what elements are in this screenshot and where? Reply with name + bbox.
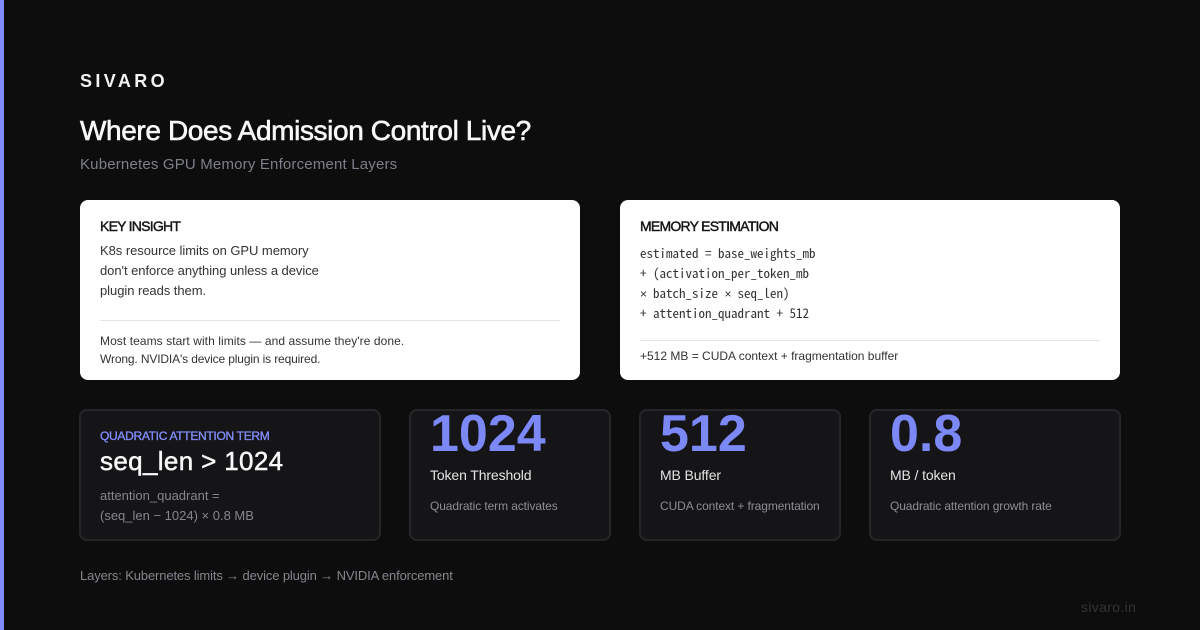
text: key insight note — [100, 334, 404, 366]
stat label: MB / token — [890, 467, 956, 483]
text: key insight body — [100, 243, 319, 298]
panel: memory estimation — [620, 200, 1120, 380]
footer: layers: Layers: Kubernetes limits → device plugin → NVIDIA enforcement — [80, 568, 453, 583]
panel: growth rate stat — [869, 409, 1121, 541]
brand wordmark: SIVARO — [80, 71, 168, 91]
stat value: 1024 — [430, 405, 546, 463]
formula: batch_size seq_len) — [653, 283, 790, 302]
panel: key insight — [80, 200, 580, 380]
text: key insight note: Most teams start with limits — and assume they're done. — [100, 334, 404, 348]
footer: site: sivaro.in — [1081, 599, 1136, 615]
heading: memory estimation: MEMORY ESTIMATION — [640, 218, 778, 234]
stat description: CUDA context + fragmentation — [660, 499, 820, 513]
value: seq_len threshold: seq_len > 1024 — [100, 446, 283, 476]
text: attention formula: attention_quadrant = — [100, 488, 220, 503]
heading: key insight: KEY INSIGHT — [100, 218, 180, 234]
stat label: Token Threshold — [430, 467, 531, 483]
label: quadratic attention term: QUADRATIC ATTENTION TERM — [100, 429, 269, 443]
text: key insight note: Wrong. NVIDIA's device plugin is required. — [100, 352, 320, 366]
panel: quadratic attention term — [79, 409, 381, 541]
stat description: Quadratic term activates — [430, 499, 558, 513]
panel: token threshold stat — [409, 409, 611, 541]
text: key insight body: don't enforce anything unless a device — [100, 263, 319, 278]
formula — [640, 243, 816, 322]
text: attention formula — [100, 488, 254, 523]
text: buffer note: +512 MB = CUDA context + fragmentation buffer — [640, 349, 898, 363]
formula: + attention_quadrant + 512 — [640, 303, 809, 322]
text: key insight body: plugin reads them. — [100, 283, 206, 298]
formula: × — [640, 287, 647, 301]
formula: estimated = base_weights_mb — [640, 243, 816, 262]
stat value: 0.8 — [890, 405, 962, 463]
formula: + (activation_per_token_mb — [640, 263, 809, 282]
stat label: MB Buffer — [660, 467, 721, 483]
panel: buffer stat — [639, 409, 841, 541]
formula: × — [724, 287, 732, 301]
text: key insight body: K8s resource limits on GPU memory — [100, 243, 309, 258]
stat description: Quadratic attention growth rate — [890, 499, 1052, 513]
title: Where Does Admission Control Live? — [80, 115, 531, 146]
stat value: 512 — [660, 405, 747, 463]
text: attention formula: (seq_len − 1024) × 0.8 MB — [100, 508, 254, 523]
accent bar — [0, 0, 4, 630]
subtitle: Kubernetes GPU Memory Enforcement Layers — [80, 156, 397, 173]
